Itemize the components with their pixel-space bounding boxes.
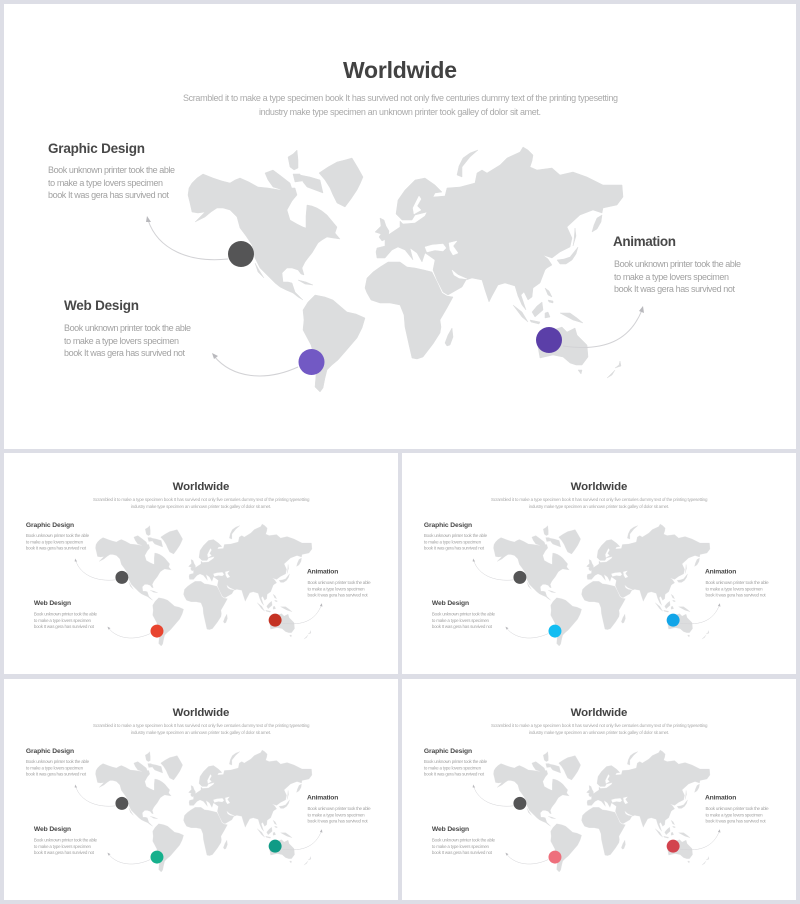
callout: Web Design: Book unknown printer took the able <box>432 838 496 843</box>
marker: Graphic Design <box>513 797 526 810</box>
callout: Graphic Design: Graphic Design <box>26 748 74 755</box>
callout: Graphic Design: Book unknown printer took the able <box>26 759 90 764</box>
subtitle text: industry make type specimen an unknown printer took galley of dolor sit amet. <box>529 504 669 509</box>
callout: Animation: Book unknown printer took the able <box>705 806 769 811</box>
callout: Animation: to make a type lovers specimen <box>705 812 763 817</box>
callout: Animation: book It was gera has survived not <box>705 592 766 597</box>
callout: Web Design: Web Design <box>64 298 139 313</box>
callout: Animation: Animation <box>705 794 736 801</box>
callout: Graphic Design: Book unknown printer took the able <box>26 533 90 538</box>
callout: Graphic Design <box>424 748 488 777</box>
title: Worldwide <box>173 707 229 719</box>
subtitle text: Scrambled it to make a type specimen book It has survived not only five centuries dummy text of the printing typesetting <box>491 497 708 502</box>
callout: Web Design: Book unknown printer took the able <box>64 323 191 333</box>
world map <box>188 147 623 392</box>
panel: red variant <box>4 453 398 674</box>
callout: Graphic Design: book It was gera has survived not <box>26 772 87 777</box>
callout: Web Design <box>34 600 98 629</box>
callout: Animation: book It was gera has survived not <box>307 592 368 597</box>
callout: Animation: to make a type lovers specimen <box>307 586 365 591</box>
marker: Animation <box>667 840 680 853</box>
callout: Animation: book It was gera has survived not <box>705 818 766 823</box>
marker: Graphic Design <box>228 241 254 267</box>
curved arrows <box>473 784 720 864</box>
world map <box>494 750 710 872</box>
marker: Web Design <box>151 625 163 638</box>
callout: Web Design: to make a type lovers specimen <box>432 618 490 623</box>
callout: Web Design: Web Design <box>34 600 71 607</box>
callout: Animation <box>705 568 769 597</box>
marker: Animation <box>269 614 282 627</box>
callout: Animation: Animation <box>307 794 338 801</box>
title: Worldwide <box>343 57 457 83</box>
callout: Graphic Design <box>26 748 90 777</box>
subtitle text: Scrambled it to make a type specimen book It has survived not only five centuries dummy text of the printing typesetting <box>491 723 708 728</box>
curved arrows <box>473 558 720 638</box>
marker: Graphic Design <box>115 797 128 810</box>
callout: Animation: book It was gera has survived not <box>614 284 735 294</box>
marker: Web Design <box>298 349 324 375</box>
callout: Animation: to make a type lovers specimen <box>307 812 365 817</box>
callout: Animation: to make a type lovers specimen <box>614 272 729 282</box>
title: Worldwide <box>571 481 627 493</box>
callout: Web Design <box>34 826 98 855</box>
callout: Web Design: book It was gera has survived not <box>432 624 493 629</box>
callout: Web Design: Web Design <box>432 600 469 607</box>
marker: Graphic Design <box>513 571 526 584</box>
callout: Graphic Design: Graphic Design <box>26 522 74 529</box>
callout: Animation: Animation <box>705 568 736 575</box>
marker: Animation <box>667 614 680 627</box>
callout: Web Design: Book unknown printer took the able <box>34 612 98 617</box>
subtitle text: industry make type specimen an unknown printer took galley of dolor sit amet. <box>131 504 271 509</box>
callout: Graphic Design: Graphic Design <box>48 141 145 156</box>
callout: Web Design: to make a type lovers specimen <box>64 336 179 346</box>
callout: Animation: Book unknown printer took the able <box>705 580 769 585</box>
callout: Web Design: to make a type lovers specimen <box>432 844 490 849</box>
panel: main slide <box>4 4 796 449</box>
panel: blue variant <box>402 453 796 674</box>
callout: Animation: to make a type lovers specimen <box>705 586 763 591</box>
callout: Animation: Animation <box>307 568 338 575</box>
callout: Web Design: book It was gera has survived not <box>432 850 493 855</box>
subtitle text <box>93 723 310 735</box>
world map <box>96 524 312 646</box>
callout: Animation: Book unknown printer took the able <box>307 806 371 811</box>
marker: Web Design <box>549 851 561 864</box>
callout: Graphic Design: Book unknown printer took the able <box>424 533 488 538</box>
callout: Animation <box>307 794 371 823</box>
curved arrows <box>75 784 322 864</box>
callout: Graphic Design: to make a type lovers specimen <box>26 540 84 545</box>
callout: Graphic Design: book It was gera has survived not <box>424 546 485 551</box>
callout: Graphic Design <box>26 522 90 551</box>
callout: Web Design: book It was gera has survived not <box>34 850 95 855</box>
callout: Animation: Book unknown printer took the able <box>614 259 741 269</box>
callout: Web Design: book It was gera has survived not <box>64 348 185 358</box>
callout: Web Design <box>64 298 191 358</box>
callout: Web Design <box>432 600 496 629</box>
callout: Web Design: Book unknown printer took the able <box>432 612 496 617</box>
callout: Graphic Design: Graphic Design <box>424 748 472 755</box>
callout: Web Design: to make a type lovers specimen <box>34 618 92 623</box>
curved arrows <box>146 216 644 376</box>
marker: Animation <box>269 840 282 853</box>
callout: Animation: book It was gera has survived not <box>307 818 368 823</box>
callout: Graphic Design: Book unknown printer took the able <box>48 165 175 175</box>
callout: Graphic Design: to make a type lovers specimen <box>26 766 84 771</box>
subtitle text <box>93 497 310 509</box>
marker: Web Design <box>151 851 163 864</box>
subtitle text: industry make type specimen an unknown printer took galley of dolor sit amet. <box>529 730 669 735</box>
callout: Graphic Design: to make a type lovers specimen <box>48 178 163 188</box>
callout: Graphic Design: book It was gera has survived not <box>424 772 485 777</box>
callout: Graphic Design: to make a type lovers specimen <box>424 540 482 545</box>
callout: Web Design <box>432 826 496 855</box>
subtitle text <box>491 497 708 509</box>
callout: Graphic Design: to make a type lovers specimen <box>424 766 482 771</box>
title: Worldwide <box>173 481 229 493</box>
marker: Animation <box>536 327 562 353</box>
marker: Web Design <box>549 625 561 638</box>
callout: Animation <box>307 568 371 597</box>
callout: Animation: Animation <box>613 234 676 249</box>
subtitle text: industry make type specimen an unknown printer took galley of dolor sit amet. <box>131 730 271 735</box>
callout: Animation <box>613 234 741 294</box>
callout: Animation <box>705 794 769 823</box>
world map <box>494 524 710 646</box>
callout: Animation: Book unknown printer took the able <box>307 580 371 585</box>
callout: Graphic Design <box>48 141 175 200</box>
callout: Web Design: book It was gera has survived not <box>34 624 95 629</box>
title: Worldwide <box>571 707 627 719</box>
world map <box>96 750 312 872</box>
panel: pink variant <box>402 679 796 900</box>
marker: Graphic Design <box>115 571 128 584</box>
curved arrows <box>75 558 322 638</box>
subtitle text: Scrambled it to make a type specimen book It has survived not only five centuries dummy text of the printing typesetting <box>183 93 618 103</box>
callout: Web Design: Web Design <box>34 826 71 833</box>
panel: green variant <box>4 679 398 900</box>
callout: Web Design: Web Design <box>432 826 469 833</box>
callout: Graphic Design: Book unknown printer took the able <box>424 759 488 764</box>
callout: Graphic Design: book It was gera has survived not <box>26 546 87 551</box>
callout: Graphic Design: book It was gera has survived not <box>48 190 169 200</box>
callout: Graphic Design: Graphic Design <box>424 522 472 529</box>
subtitle text: Scrambled it to make a type specimen book It has survived not only five centuries dummy text of the printing typesetting <box>93 497 310 502</box>
subtitle text <box>491 723 708 735</box>
callout: Web Design: to make a type lovers specimen <box>34 844 92 849</box>
callout: Web Design: Book unknown printer took the able <box>34 838 98 843</box>
subtitle text: industry make type specimen an unknown printer took galley of dolor sit amet. <box>259 107 541 117</box>
subtitle text <box>183 93 618 117</box>
subtitle text: Scrambled it to make a type specimen book It has survived not only five centuries dummy text of the printing typesetting <box>93 723 310 728</box>
callout: Graphic Design <box>424 522 488 551</box>
